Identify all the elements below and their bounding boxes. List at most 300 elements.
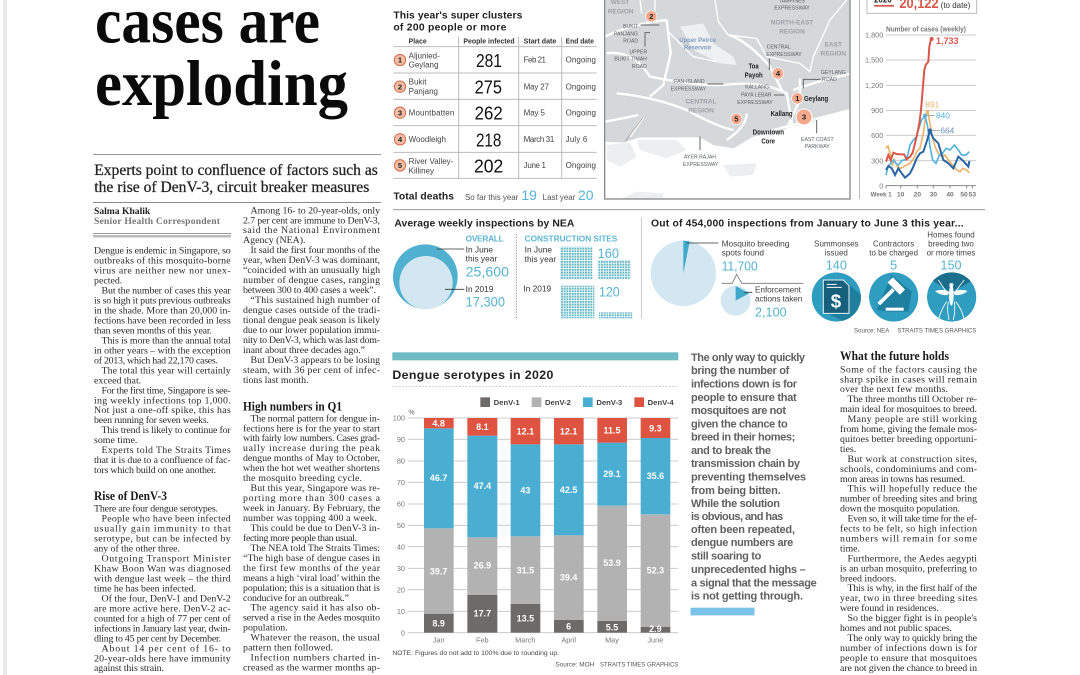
article column 1: time he has been infected.	[94, 584, 196, 594]
article column 3: what the future holds: main ideal for mosquitoes to breed.	[840, 404, 977, 415]
row 4: July 6	[566, 135, 588, 144]
article column 1: Of the four, DenV-1 and DenV-2	[102, 593, 231, 604]
row 4	[394, 129, 588, 150]
x axis labels: May	[605, 635, 619, 644]
byline: Salma Khalik	[94, 206, 151, 217]
article column 3: what the future holds: The only way to quickly bring the	[848, 633, 978, 644]
article column 2: The NEA told The Straits Times:	[250, 543, 380, 554]
map road labels: PARKWAY	[805, 144, 830, 150]
breeding spots text: spots found	[722, 248, 764, 258]
summonses figure: 140	[826, 259, 847, 273]
place labels: Core	[761, 136, 775, 145]
dark blue line	[886, 131, 969, 178]
bar: March	[511, 418, 540, 633]
article column 3: what the future holds: time.	[840, 543, 860, 554]
contractors figure: 5	[890, 259, 897, 273]
x axis labels: Week 1	[871, 192, 892, 199]
article column 2: inant about three decades ago.”	[243, 345, 365, 356]
bar: June	[641, 418, 670, 634]
article column 2: when the hot wet weather shortens	[243, 463, 380, 474]
article column 1	[94, 246, 231, 674]
peak markers: 840	[936, 111, 950, 121]
article column 3: what the future holds: sharp spike in cases will remain	[840, 374, 977, 385]
article column 2: “The high base of dengue cases in	[243, 553, 380, 564]
chart title: Dengue serotypes in 2020	[392, 368, 553, 382]
panel heading: Out of 454,000 inspections from January to June 3 this year...	[651, 218, 964, 229]
article column 2: the mosquito breeding cycle.	[243, 473, 362, 484]
pull quote: While the solution	[691, 498, 780, 510]
map road labels: AYER RAJAH	[684, 155, 716, 161]
x axis labels: 40	[946, 192, 954, 199]
x axis labels: April	[561, 635, 576, 644]
article column 1: exceed that.	[94, 375, 141, 386]
article column 1: Experts told The Straits Times	[102, 445, 231, 456]
article column 2: steam, with 36 per cent of infec-	[243, 365, 380, 376]
pull quote	[691, 352, 817, 602]
map road labels: PANJANG	[614, 31, 638, 37]
article column 1: in other years – with the exception	[94, 345, 231, 356]
map road labels: ROAD	[822, 77, 837, 83]
article column 2: “coincided with an unusually high	[243, 265, 380, 276]
table header	[409, 37, 594, 46]
article column 2: creased as the warmer months ap-	[243, 663, 380, 674]
pull quote: infections down is for	[691, 379, 798, 391]
row 5: Ongoing	[566, 161, 596, 170]
row 1: Feb 21	[524, 56, 547, 65]
row 4: Woodleigh	[409, 135, 446, 144]
chart legend box	[867, 0, 977, 13]
article column 3: what the future holds: down the mosquito population.	[840, 504, 960, 515]
article column 1: But the number of cases this year	[102, 286, 231, 297]
map region labels: CENTRAL	[686, 98, 717, 105]
pull quote: mosquitoes are not	[691, 405, 786, 417]
peak markers: 891	[925, 99, 940, 109]
legend: DenV-1	[494, 398, 520, 407]
panel: 454,000 inspections	[651, 218, 976, 335]
row 1: 1	[398, 56, 403, 65]
bar: May: 29.1	[603, 469, 621, 479]
y axis labels: 1,200	[865, 81, 883, 90]
article column 2: It said the first four months of the	[250, 245, 381, 256]
article column 3: what the future holds: schools, condominiums and com-	[840, 464, 977, 475]
row 3: 262	[475, 103, 503, 124]
article column 1: Dengue is endemic in Singapore, so	[94, 246, 231, 257]
cluster markers on map: 1	[795, 94, 800, 103]
icon: mosquito	[927, 268, 976, 322]
2020 red line	[886, 39, 931, 162]
subheading: the rise of DenV-3, circuit breaker measures	[94, 179, 369, 196]
table header: End date	[566, 37, 594, 46]
source line	[854, 328, 976, 335]
article column 2: Whatever the reason, the usual	[250, 633, 380, 644]
table header: Place	[409, 37, 427, 46]
x axis labels: 10	[897, 192, 905, 199]
article column 2: number was topping 400 a week.	[243, 513, 377, 524]
y axis labels: 300	[871, 156, 883, 165]
bar: Jan: 46.7	[430, 473, 447, 483]
article column 3: what the future holds: from home, giving the female mos-	[840, 424, 977, 435]
article column 3: what the future holds: Some of the factors causing the	[840, 364, 978, 375]
article column 1: of 2013, which had 22,170 cases.	[94, 355, 218, 366]
contractors figure: Contractors	[873, 240, 914, 249]
bar: March: 13.5	[517, 614, 534, 624]
article column 2: number of dengue cases, ranging	[243, 275, 380, 286]
article column 2: the first few months of the year	[243, 563, 381, 574]
map region labels: REGION	[688, 107, 714, 114]
bar: March: 31.5	[517, 565, 534, 575]
x axis labels: 53	[969, 192, 976, 199]
article column 3: what the future holds: But work at construction sites,	[848, 454, 977, 465]
x axis labels: Jan	[433, 635, 445, 644]
light blue line	[886, 116, 969, 175]
table header: People infected	[463, 37, 515, 46]
pull quote: often been repeated,	[691, 524, 795, 536]
article column 2: dengue months of May to October,	[243, 453, 380, 464]
bar: Jan: 39.7	[430, 566, 447, 576]
cluster markers on map	[646, 11, 812, 125]
source line: STRAITS TIMES GRAPHICS	[600, 661, 678, 668]
icon: gavel	[869, 272, 918, 322]
map road labels: EXPRESSWAY	[671, 86, 707, 92]
article column 3: what the future holds: year, two in three breeding sites	[840, 593, 977, 604]
map road labels: PAYA LEBAR	[741, 93, 772, 99]
article column 2: But DenV-3 appears to be losing	[250, 355, 380, 366]
overall figures: In June	[466, 245, 493, 255]
row 5: June 1	[524, 161, 547, 170]
article column 3: what the future holds: were found in residences.	[840, 603, 939, 614]
article column 3: what the future holds: mon areas in towns has resumed.	[840, 474, 965, 485]
cluster markers on map: 5	[734, 115, 739, 124]
article column 2: This could be due to DenV-3 in-	[250, 523, 380, 534]
map road labels: EXPRESSWAY	[737, 100, 773, 106]
map region labels: REGION	[779, 29, 805, 36]
article column 3: what the future holds: numbers will remain for some	[840, 534, 978, 544]
article column 1: This trend is likely to continue for	[102, 425, 231, 436]
bar: Feb: 26.9	[474, 561, 491, 571]
pull quote: a signal that the message	[691, 578, 817, 590]
row 1: Geylang	[409, 60, 438, 69]
article column 3: what the future holds: people to ensure that mosquitoes	[840, 653, 977, 664]
map region labels: REGION	[821, 51, 846, 58]
summonses figure: Summonses	[814, 240, 859, 249]
article column 3: what the future holds: number of infections down is for	[840, 643, 978, 654]
article column 2: with fairly low numbers. Cases grad-	[243, 433, 380, 444]
contractors figure	[869, 240, 918, 273]
peak markers	[923, 36, 958, 136]
bar: May	[597, 418, 627, 633]
map region labels	[608, 0, 846, 114]
y axis: 70	[397, 478, 405, 487]
map region labels: NORTH-EAST	[771, 20, 813, 27]
pie: enforcement actions	[721, 286, 752, 316]
homes figure: breeding two	[928, 240, 974, 249]
cluster markers on map: 2	[649, 12, 653, 21]
article column 2: Infection numbers charted in-	[250, 653, 380, 664]
article column 3: what the future holds	[840, 348, 978, 674]
article column 1: ing weekly infections top 1,000.	[94, 395, 231, 406]
construction sites figures: 160	[598, 245, 619, 261]
overall figures: this year	[466, 254, 497, 264]
row 2: 275	[475, 77, 502, 98]
icon: document with dollar	[812, 272, 861, 322]
article column 3: what the future holds: Furthermore, the Aedes aegypti	[848, 553, 977, 564]
article column 2: fections here is for the year to start	[243, 423, 380, 434]
article column 1: For the first time, Singapore is see-	[102, 385, 231, 396]
article column 1: with dengue last week – the third	[94, 574, 231, 584]
article column 3: what the future holds: is an urban mosquito, preferring to	[840, 563, 977, 574]
article column 2: Among 16- to 20-year-olds, only	[250, 205, 380, 216]
y axis labels: 1,500	[865, 56, 883, 65]
y axis labels	[865, 31, 883, 190]
peak markers: 1,733	[936, 36, 958, 46]
row 2: 2	[398, 82, 402, 91]
pull quote: preventing themselves	[691, 472, 806, 484]
row 4: March 31	[524, 135, 555, 144]
overall figures: 25,600	[466, 263, 509, 279]
article column 1: Not just a one-off spike, this has	[94, 405, 231, 416]
row 5	[394, 155, 596, 176]
enforcement text	[755, 284, 803, 320]
place labels: Downtown	[753, 127, 784, 136]
bar: Feb: 17.7	[474, 609, 491, 619]
row 2: Bukit	[409, 78, 427, 87]
article column 1: counted for a high of 77 per cent of	[94, 613, 231, 624]
x axis labels: June	[647, 635, 663, 644]
article column 2: due to our lower population immu-	[243, 325, 380, 336]
article column 1: The total this year will certainly	[102, 365, 231, 376]
map of clusters	[605, 0, 850, 199]
bar: Jan	[424, 418, 454, 633]
row 1: Ongoing	[566, 56, 596, 65]
article column 1: any of the other three.	[94, 544, 180, 555]
pull quote: given the chance to	[691, 418, 788, 430]
map road labels: EXPRESSWAY	[766, 52, 802, 58]
bar: June: 35.6	[647, 471, 664, 481]
row 5: River Valley-	[409, 157, 454, 166]
y axis: 10	[397, 607, 405, 616]
bar: June: 2.9	[649, 624, 662, 634]
bar: April: 12.1	[560, 427, 577, 437]
map road labels: BUKIT	[623, 24, 639, 30]
article column 1: pected.	[94, 276, 122, 287]
peak markers: 664	[940, 126, 955, 136]
article column 1: than seven months of this year.	[94, 326, 212, 336]
total deaths: 19	[521, 187, 537, 203]
article column 2: High numbers in Q1	[243, 398, 342, 414]
x axis labels: Feb	[476, 635, 489, 644]
homes figure: 150	[940, 259, 962, 273]
row 5: 202	[474, 155, 503, 176]
bar: April: 42.5	[560, 485, 577, 495]
row 4: 4	[398, 135, 403, 144]
breeding spots text: 11,700	[722, 259, 758, 274]
y axis: 30	[397, 564, 405, 573]
map road labels: EXPRESSWAY	[774, 6, 810, 12]
total deaths	[393, 187, 594, 203]
source line: Source: NEA	[854, 328, 890, 335]
headline	[95, 0, 348, 120]
article column 2: between 300 to 400 cases a week”.	[243, 285, 376, 296]
total deaths: 20	[578, 187, 594, 203]
row 3: May 5	[524, 108, 546, 117]
pull quote: transmission chain by	[691, 458, 801, 470]
article column 2	[243, 205, 381, 674]
map road labels: CENTRAL	[767, 45, 791, 51]
y axis: 20	[397, 585, 405, 594]
article column 2: Agency (NEA).	[243, 235, 306, 246]
total deaths: Total deaths	[393, 192, 454, 203]
row 4: 218	[476, 129, 501, 150]
map road labels: PAN-ISLAND	[674, 79, 705, 85]
article column 3: what the future holds: What the future holds	[840, 348, 949, 363]
construction sites figures: CONSTRUCTION SITES	[525, 234, 618, 244]
article column 3: what the future holds: number of breeding sites and bring	[840, 494, 977, 505]
article column 2: pattern then followed.	[243, 643, 333, 654]
article column 2: nity to DenV-3, which was last dom-	[243, 335, 380, 346]
article column 1: are more active here. DenV-2 ac-	[94, 603, 231, 614]
article column 3: what the future holds: are not given the chance to breed in	[840, 663, 977, 674]
article column 2: tions last month.	[243, 375, 309, 386]
y axis: 100	[393, 414, 405, 423]
map road labels: ROAD	[623, 39, 638, 45]
pull quote: breed in their homes;	[691, 432, 795, 444]
source line	[555, 661, 678, 668]
land	[605, 0, 850, 148]
article column 1: About 14 per cent of 16- to	[102, 643, 231, 654]
subheading: Experts point to confluence of factors such as	[94, 162, 378, 179]
overall figures	[466, 234, 509, 310]
x axis labels	[871, 192, 976, 199]
bar: Feb	[467, 418, 497, 633]
homes figure	[927, 231, 975, 273]
row 3	[394, 103, 596, 124]
legend: DenV-3	[596, 398, 622, 407]
breeding spots text	[722, 239, 790, 274]
table title: of 200 people or more	[393, 22, 507, 33]
note: NOTE: Figures do not add to 100% due to rounding up.	[392, 650, 559, 657]
article column 1: Rise of DenV-3	[94, 488, 167, 503]
article column 1: tors which build on one another.	[94, 465, 216, 476]
article column 2: dengue cases outside of the tradi-	[243, 305, 380, 316]
article column 2: conducive for an outbreak.”	[243, 593, 349, 604]
article column 3: what the future holds: ties.	[840, 444, 856, 455]
map road labels: GEYLANG	[821, 70, 846, 76]
y axis labels: 0	[879, 181, 883, 190]
bar: April	[554, 418, 584, 633]
article column 2: “This sustained high number of	[250, 295, 381, 306]
row 1	[394, 50, 596, 71]
place labels: Kallang	[771, 109, 793, 118]
pull quote: is obvious, and has	[691, 511, 783, 523]
article column 1: that it is due to a confluence of fac-	[94, 455, 231, 466]
y axis: 60	[397, 500, 405, 509]
article column 2: porting more than 300 cases a	[243, 493, 381, 504]
summonses figure: issued	[825, 249, 848, 258]
article column 3: what the future holds: breed indoors.	[840, 573, 896, 584]
article column 1: virus are neither new nor unex-	[94, 266, 231, 277]
byline: Senior Health Correspondent	[94, 216, 221, 227]
article column 2: population; this is a situation that is	[243, 583, 380, 594]
article column 3: what the future holds: fects to be felt, so high infection	[840, 524, 977, 534]
article column 2: But this year, Singapore was re-	[250, 483, 380, 494]
bar: May: 11.5	[603, 425, 620, 435]
construction sites figures: this year	[525, 254, 556, 264]
bar: Jan: 8.9	[432, 618, 445, 628]
article column 1: Outgoing Transport Minister	[102, 554, 231, 565]
pull quote: from being bitten.	[691, 485, 781, 497]
row 1: 281	[476, 50, 502, 71]
row 2: Ongoing	[566, 82, 596, 91]
article column 1: been running for seven weeks.	[94, 415, 209, 426]
article column 1: some time.	[94, 435, 137, 446]
x axis labels: 30	[930, 192, 937, 199]
article column 1: serotype, but can be infected by	[94, 534, 231, 545]
cluster markers on map: 4	[776, 69, 781, 78]
table: super clusters	[393, 11, 597, 203]
dot grids	[560, 247, 632, 318]
total deaths: Last year	[543, 193, 576, 202]
bar: Jan: 4.8	[432, 418, 445, 428]
bar: Feb: 47.4	[474, 481, 491, 491]
article column 2: 2.7 per cent are immune to DenV-3,	[243, 215, 380, 226]
y axis: 40	[397, 542, 405, 551]
article column 2: week in January. By February, the	[243, 503, 381, 514]
legend: DenV-2	[545, 398, 571, 407]
article column 1: against this strain.	[94, 663, 164, 674]
y axis: 90	[397, 435, 405, 444]
legend	[480, 397, 674, 407]
bar: June: 9.3	[649, 424, 662, 434]
pie: breeding spots	[651, 241, 718, 306]
article column 1: Khaw Boon Wan was diagnosed	[94, 564, 231, 574]
panel: dengue serotypes: %	[408, 409, 415, 416]
x axis labels: March	[515, 635, 536, 644]
table header: Start date	[524, 37, 556, 46]
bar: Feb: 8.1	[476, 422, 489, 432]
bar: May: 53.9	[603, 558, 621, 568]
overlapping circles	[393, 244, 464, 309]
article column 1: is so high it puts previous outbreaks	[94, 296, 231, 307]
map road labels: UPPER	[629, 50, 647, 56]
article column 2: The normal pattern for dengue in-	[250, 413, 380, 424]
article column 3: what the future holds: Many people are still working	[848, 414, 977, 425]
article column 1: There are four dengue serotypes.	[94, 504, 218, 515]
y axis labels: 1,800	[865, 31, 883, 40]
article column 1: outbreaks of this mosquito-borne	[94, 256, 231, 267]
article column 2: The agency said it has also ob-	[250, 603, 380, 614]
article column 3: what the future holds: So the bigger fight is in people's	[848, 613, 977, 624]
total deaths: So far this year	[465, 193, 519, 202]
bar: April: 6	[566, 622, 571, 632]
bar: March: 43	[520, 485, 530, 495]
source line: Source: MOH	[555, 661, 595, 668]
place labels	[745, 62, 829, 145]
article column 3: what the future holds: This is why, in the first half of the	[848, 583, 978, 594]
article column 1: usually gain immunity to that	[94, 524, 231, 535]
line chart: weekly cases	[865, 0, 977, 199]
row 3: Mountbatten	[409, 108, 454, 117]
pull quote: The only way to quickly	[691, 352, 806, 364]
subheading	[94, 162, 378, 196]
overall figures: In 2019	[466, 284, 494, 294]
pull quote: unprecedented highs –	[691, 564, 806, 576]
pull quote: dengue numbers are	[691, 537, 793, 549]
article column 1: 20-year-olds here have immunity	[94, 653, 231, 664]
construction sites figures: 120	[599, 284, 620, 300]
line chart: weekly cases: Number of cases (weekly)	[886, 26, 966, 33]
legend: DenV-4	[648, 398, 674, 407]
homes figure: or more times	[927, 249, 975, 258]
